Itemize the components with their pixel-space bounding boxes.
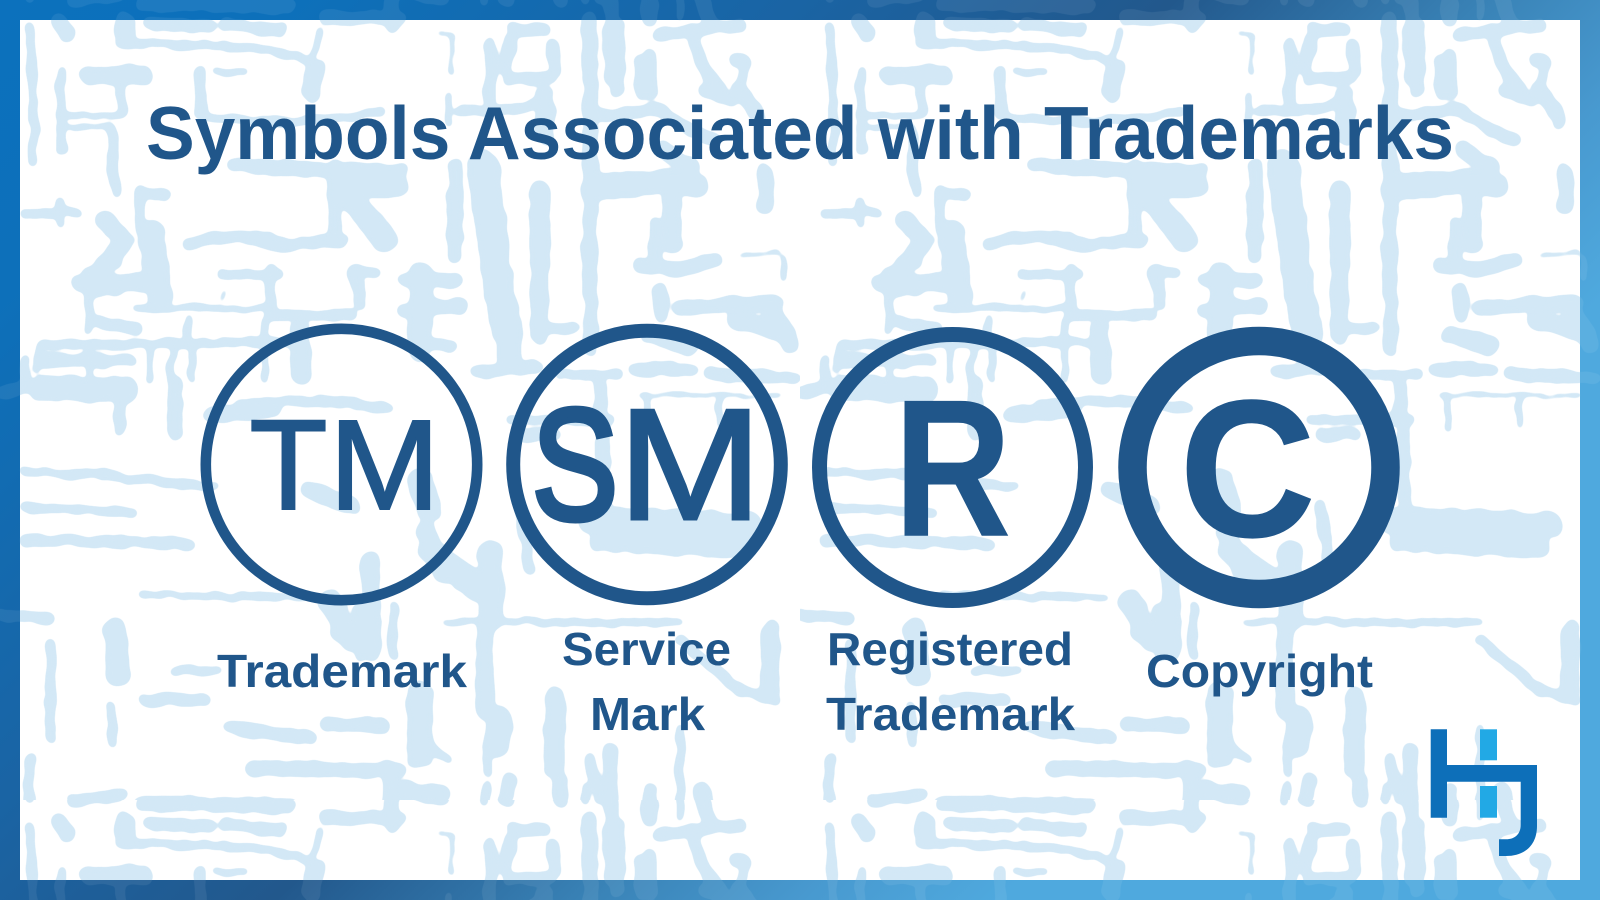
icon: TM circle [206,329,477,600]
symbol group: service mark [513,331,781,740]
SM letters: S [532,377,618,553]
symbol group: copyright [1132,341,1386,697]
C letter: C [1180,361,1315,578]
label: Trademark: Trademark [217,645,467,697]
logo: HJ monogram [1431,729,1537,856]
icon: R circle [820,334,1086,600]
label: Service Mark: Service [562,623,731,675]
TM letters: M [329,394,440,537]
title: Symbols Associated with Trademarks [146,91,1454,175]
TM letters: T [250,394,328,537]
symbol group: trademark [206,329,477,697]
R letter: R [894,359,1012,578]
label: Service Mark: Mark [590,688,705,740]
label: Service Mark [562,623,731,740]
icon: SM circle [513,331,781,598]
label: Copyright: Copyright [1146,645,1373,697]
icon: C circle [1132,341,1386,594]
label: Registered Trademark [826,623,1075,740]
label: Registered Trademark: Trademark [826,688,1075,740]
symbol group: registered trademark [820,334,1086,740]
SM letters: M [618,377,762,553]
label: Registered Trademark: Registered [827,623,1073,675]
